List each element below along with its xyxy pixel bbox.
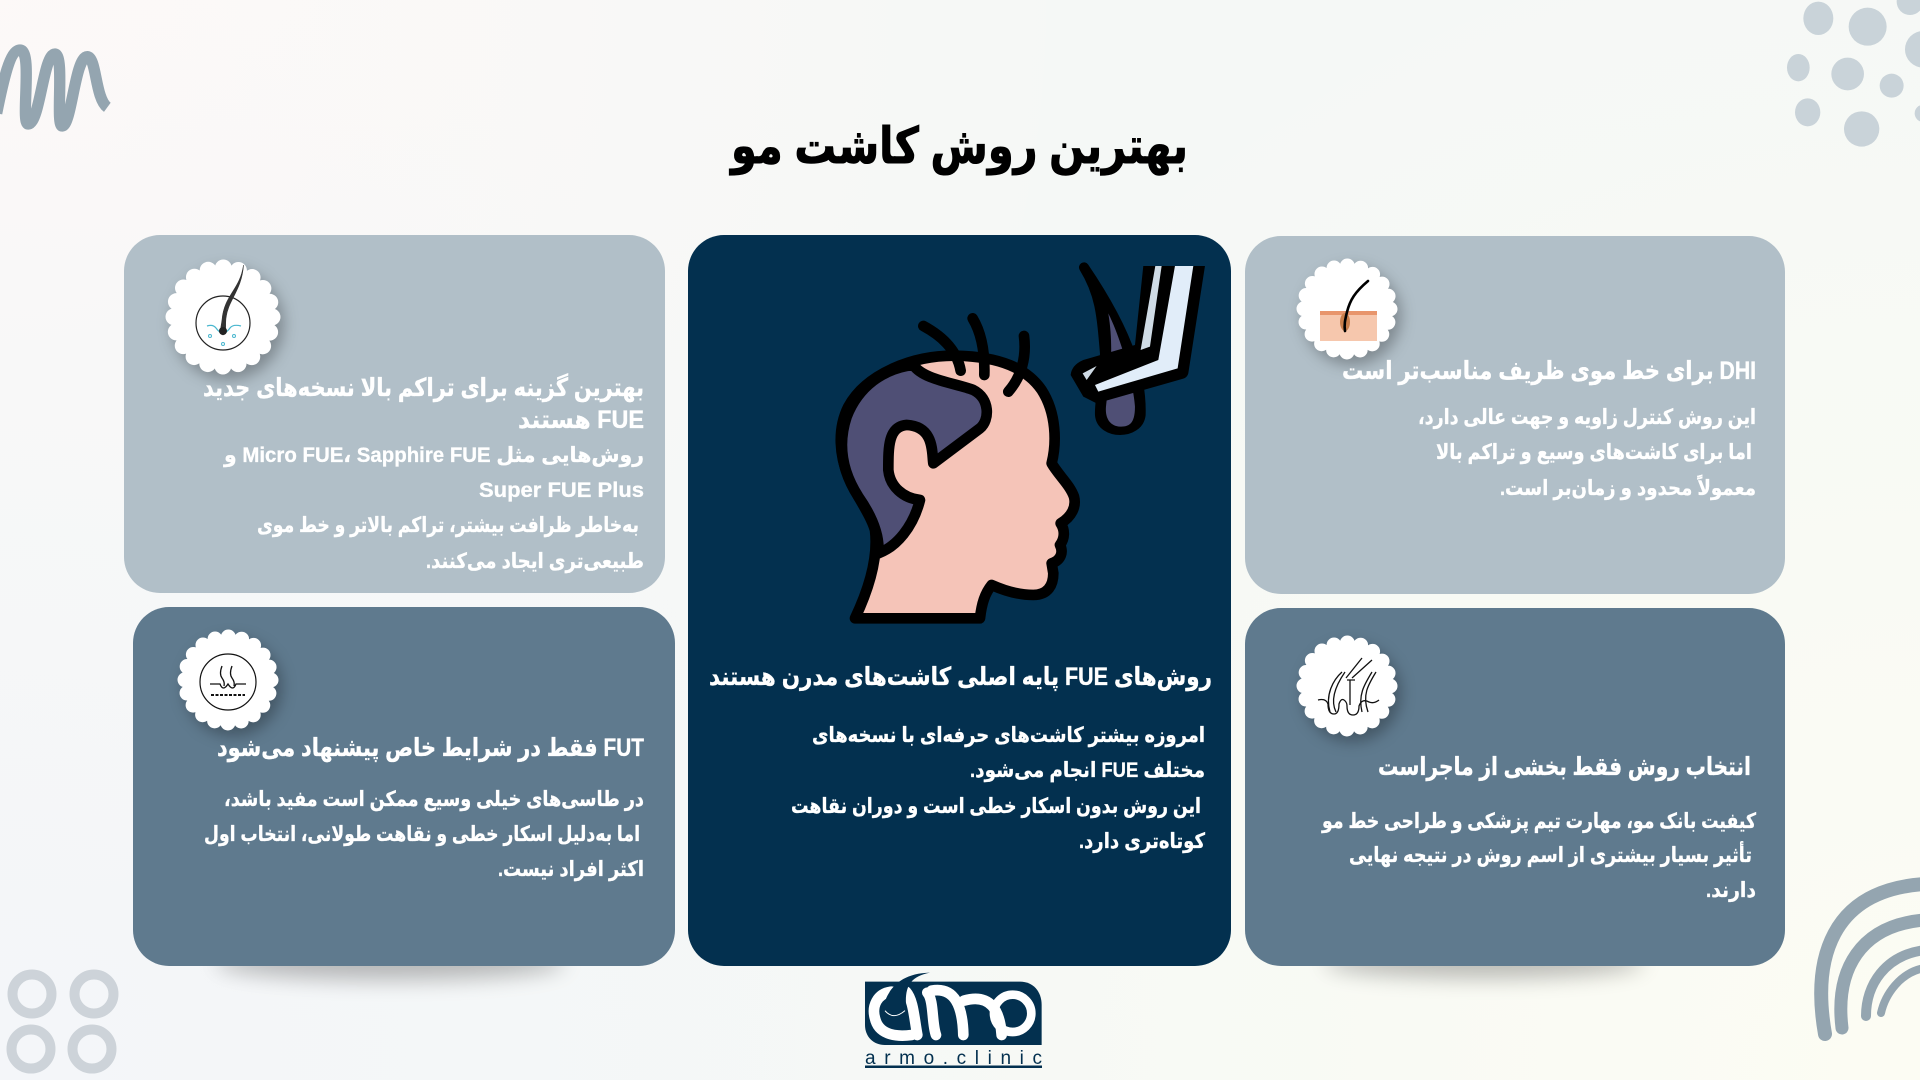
hair graft	[1084, 267, 1141, 430]
logo underline	[865, 1066, 1042, 1068]
heading: انتخاب روش فقط بخشی از ماجراست	[1378, 753, 1751, 782]
hair	[842, 365, 987, 553]
illustration: bald head with tweezers	[841, 266, 1205, 618]
logo hair	[883, 973, 930, 1015]
body text: امروزه بیشتر کاشت‌های حرفه‌ای با نسخه‌های	[812, 724, 1205, 747]
icon: FUT badge	[185, 637, 271, 723]
panel: best density FUE	[124, 235, 665, 593]
panel: central FUE	[688, 235, 1231, 966]
icon: hair follicle badge	[174, 265, 272, 366]
panel: method is only part	[1245, 608, 1785, 966]
heading line 2: FUE هستند	[518, 406, 644, 434]
icon: implanter badge	[1304, 643, 1390, 729]
panel: best density FUE: Super FUE Plus	[479, 479, 644, 502]
panel: best density FUE: به‌خاطر ظرافت بیشتر، تراکم بالاتر و خط موی	[257, 514, 639, 537]
panel: FUT: اکثر افراد نیست.	[498, 858, 644, 881]
title: بهترین روش کاشت مو	[729, 118, 1188, 176]
body text: در طاسی‌های خیلی وسیع ممکن است مفید باشد،	[224, 788, 644, 811]
body text: کیفیت بانک مو، مهارت تیم پزشکی و طراحی خط مو	[1321, 810, 1757, 833]
heading: بهترین گزینه برای تراکم بالا نسخه‌های جدید	[203, 373, 644, 403]
panel: method is only part: تأثیر بسیار بیشتری از اسم روش در نتیجه نهایی	[1349, 840, 1752, 867]
panel: best density FUE: طبیعی‌تری ایجاد می‌کنند.	[426, 550, 644, 573]
decoration: arcs bottom right	[1821, 884, 1920, 1034]
panel: central FUE: این روش بدون اسکار خطی است و دوران نقاهت	[791, 795, 1201, 818]
decoration: dots top right	[1787, 0, 1920, 147]
panel: method is only part: دارند.	[1706, 879, 1756, 902]
logo letters	[874, 990, 1031, 1036]
panel: DHI: اما برای کاشت‌های وسیع و تراکم بالا	[1436, 441, 1752, 464]
heading: FUT فقط در شرایط خاص پیشنهاد می‌شود	[217, 734, 644, 763]
decoration: squiggle top left	[0, 50, 107, 126]
logo	[865, 973, 1042, 1069]
heading: DHI برای خط موی ظریف مناسب‌تر است	[1342, 357, 1756, 386]
body text: این روش کنترل زاویه و جهت عالی دارد،	[1418, 406, 1756, 429]
tweezers	[1071, 266, 1205, 403]
body text: روش‌هایی مثل Micro FUE، Sapphire FUE و	[223, 444, 644, 467]
panel: FUT	[133, 607, 675, 966]
card shadows	[215, 944, 1644, 980]
decoration: rings bottom left	[12, 974, 114, 1068]
logo background	[865, 982, 1042, 1045]
logo wordmark: armo.clinic	[865, 1048, 1042, 1069]
panel: DHI: معمولاً محدود و زمان‌بر است.	[1500, 474, 1756, 500]
head	[841, 356, 1075, 618]
panel: FUT: اما به‌دلیل اسکار خطی و نقاهت طولانی، انتخاب اول	[204, 823, 640, 846]
panel: central FUE: مختلف FUE انجام می‌شود.	[970, 759, 1205, 782]
panel: central FUE: کوتاه‌تری دارد.	[1079, 830, 1206, 853]
panel: DHI	[1245, 236, 1785, 594]
heading: روش‌های FUE پایه اصلی کاشت‌های مدرن هستند	[709, 663, 1212, 692]
icon: skin hair badge	[1304, 266, 1390, 352]
hair strands	[923, 318, 1025, 392]
